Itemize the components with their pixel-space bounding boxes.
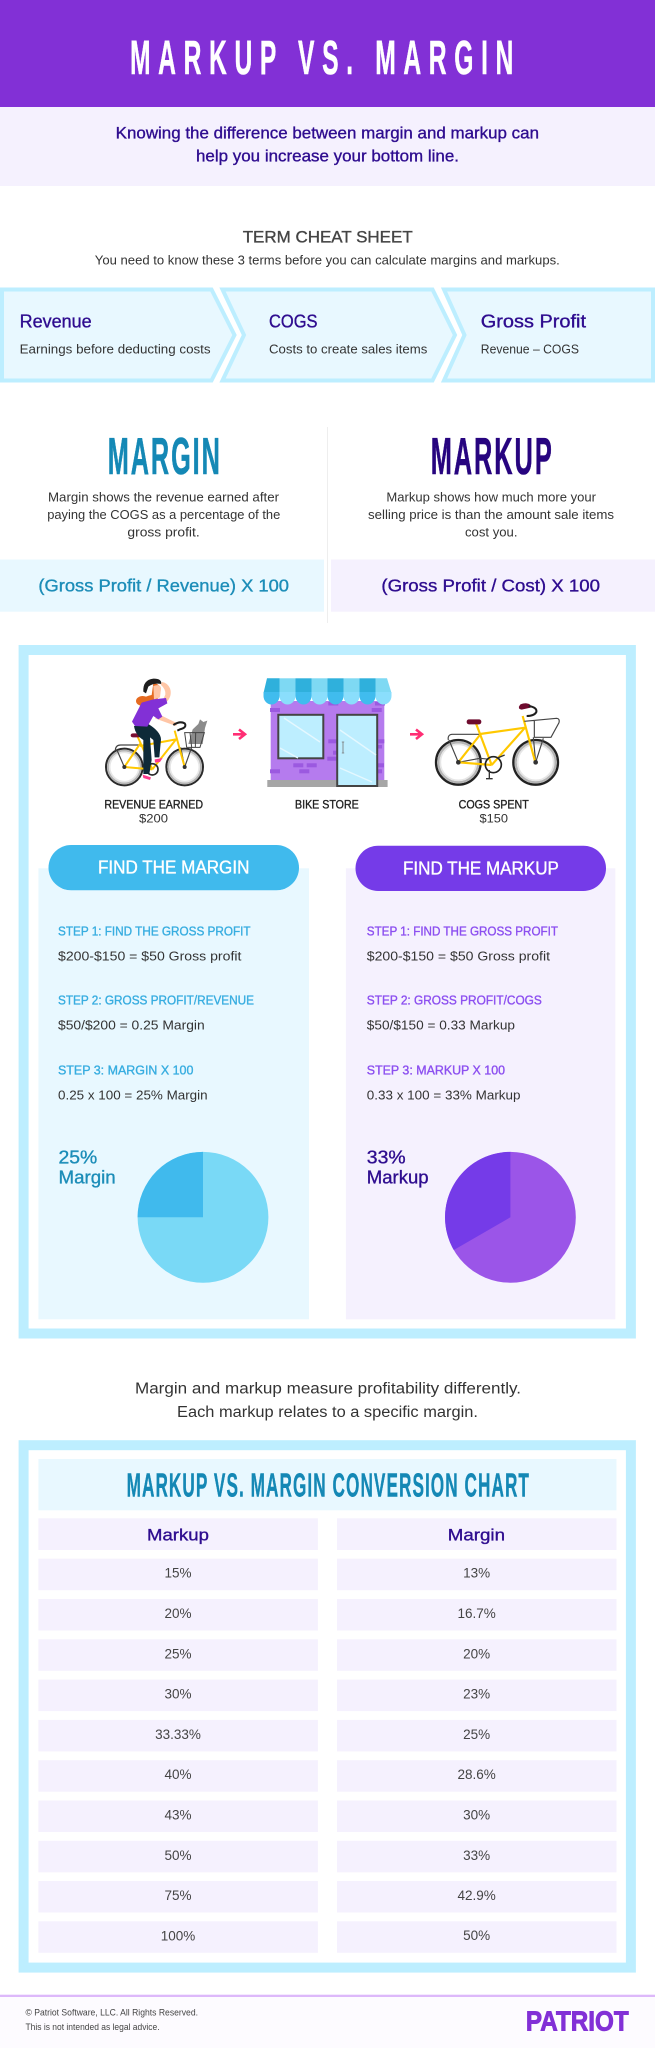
label: COGS spent: COGS SPENT — [459, 797, 529, 811]
header banner — [0, 0, 655, 107]
markup column values: 43% — [164, 1808, 192, 1822]
margin result label: 25% — [58, 1146, 97, 1167]
copyright text: This is not intended as legal advice. — [26, 2022, 160, 2033]
label: revenue earned: $200 — [139, 811, 168, 825]
column header: margin — [337, 1518, 616, 1550]
pill heading: find the markup: FIND THE MARKUP — [403, 858, 559, 878]
markup description: selling price is than the amount sale items — [368, 507, 614, 522]
markup step 3: 0.33 x 100 = 33% Markup — [367, 1087, 520, 1102]
markup column values: 25% — [164, 1646, 192, 1661]
markup description: Markup shows how much more your — [386, 490, 597, 505]
margin column values: 42.9% — [457, 1888, 496, 1903]
icon: yellow bike — [436, 703, 559, 785]
margin description: paying the COGS as a percentage of the — [47, 507, 280, 522]
margin step 2: STEP 2: GROSS PROFIT/REVENUE — [58, 994, 254, 1008]
markup step 3: STEP 3: MARKUP X 100 — [367, 1063, 505, 1077]
markup step 1: STEP 1: FIND THE GROSS PROFIT — [367, 925, 558, 939]
label: COGS spent: $150 — [480, 811, 508, 825]
term cheat sheet heading — [95, 227, 560, 267]
markup column values: 40% — [164, 1767, 192, 1782]
markup step 2: $50/$150 = 0.33 Markup — [367, 1017, 515, 1032]
markup column values: 75% — [164, 1888, 192, 1903]
markup step 3 — [367, 1063, 520, 1102]
markup column values — [38, 1559, 318, 1953]
markup column values: 15% — [164, 1566, 192, 1581]
markup result label: 33% — [367, 1146, 406, 1167]
margin column values: 25% — [463, 1727, 490, 1742]
term cheat sheet heading: TERM CHEAT SHEET — [243, 227, 413, 246]
margin step 3: 0.25 x 100 = 25% Margin — [58, 1087, 208, 1102]
markup step 1 — [367, 925, 558, 963]
subtitle band — [0, 107, 655, 186]
margin column values: 30% — [463, 1808, 490, 1822]
markup result label — [367, 1146, 429, 1187]
panel: conversion chart — [24, 1445, 631, 1968]
markup description: cost you. — [465, 524, 518, 539]
margin description: gross profit. — [127, 524, 200, 539]
panel: worked example frame — [24, 650, 631, 1334]
term arrow: COGS: COGS — [269, 311, 318, 331]
copyright text — [26, 2008, 198, 2033]
margin column values: 16.7% — [457, 1606, 496, 1621]
pill heading: find the margin: FIND THE MARGIN — [98, 857, 249, 877]
markup column values: 100% — [161, 1928, 195, 1944]
margin step 3 — [58, 1063, 208, 1102]
term arrow: COGS: Costs to create sales items — [269, 341, 428, 356]
subtitle band: help you increase your bottom line. — [196, 148, 459, 166]
term arrow: COGS — [222, 290, 455, 380]
chart title — [38, 1459, 616, 1510]
arrow: store to bike — [410, 730, 422, 739]
label: COGS spent — [459, 797, 529, 825]
term cheat sheet heading: You need to know these 3 terms before you can calculate margins and markups. — [95, 252, 560, 267]
pill heading: find the margin — [48, 845, 299, 890]
intro text for conversion chart: Margin and markup measure profitability differently. — [135, 1380, 521, 1397]
margin description — [47, 490, 280, 539]
margin step 1: STEP 1: FIND THE GROSS PROFIT — [58, 925, 251, 939]
column header: markup: Markup — [147, 1525, 209, 1544]
icon: cyclist with bike and cat — [106, 679, 207, 785]
column header: margin: Margin — [448, 1525, 505, 1544]
margin description: Margin shows the revenue earned after — [48, 490, 280, 505]
markup result label: Markup — [367, 1166, 429, 1187]
label: bike store: BIKE STORE — [295, 797, 359, 811]
margin step 1 — [58, 925, 251, 963]
pill heading: find the markup — [356, 846, 606, 891]
term arrow: revenue: Earnings before deducting costs — [20, 341, 211, 356]
margin formula: (Gross Profit / Revenue) X 100 — [38, 576, 289, 596]
markup step 1: $200-$150 = $50 Gross profit — [367, 948, 550, 963]
pie chart: 33% markup — [445, 1152, 576, 1283]
margin step 3: STEP 3: MARGIN X 100 — [58, 1063, 193, 1077]
panel: margin definition — [0, 428, 324, 612]
awning — [264, 678, 392, 704]
markup formula — [331, 560, 655, 612]
intro text for conversion chart — [135, 1380, 521, 1421]
panel: find the markup — [346, 846, 615, 1319]
markup column values: 20% — [164, 1606, 192, 1621]
margin step 2 — [58, 994, 254, 1032]
column header: markup — [38, 1518, 318, 1550]
margin result label: Margin — [58, 1166, 116, 1187]
term arrow: gross profit — [444, 290, 653, 380]
margin column values: 13% — [463, 1566, 490, 1581]
markup description — [368, 490, 614, 539]
margin result label — [58, 1146, 116, 1187]
term arrow: revenue: Revenue — [20, 311, 92, 331]
markup step 2 — [367, 994, 542, 1032]
markup step 2: STEP 2: GROSS PROFIT/COGS — [367, 994, 542, 1008]
margin step 1: $200-$150 = $50 Gross profit — [58, 948, 242, 963]
label: revenue earned — [104, 797, 203, 825]
logo: Patriot: PATRIOT — [526, 2006, 629, 2037]
markup column values: 30% — [164, 1687, 192, 1702]
markup formula: (Gross Profit / Cost) X 100 — [381, 576, 600, 596]
margin column values: 33% — [463, 1848, 490, 1863]
pie chart: 25% margin — [138, 1152, 268, 1283]
margin column values: 28.6% — [457, 1767, 496, 1782]
copyright text: © Patriot Software, LLC. All Rights Reserved. — [26, 2008, 198, 2019]
term arrow: gross profit: Revenue – COGS — [481, 341, 579, 356]
margin column values — [337, 1559, 616, 1953]
margin formula — [0, 560, 324, 612]
subtitle band: Knowing the difference between margin and markup can — [116, 124, 539, 142]
margin column values: 20% — [463, 1646, 490, 1661]
markup column values: 50% — [164, 1848, 192, 1863]
arrow: cyclist to store — [233, 730, 245, 739]
term arrow: revenue — [2, 290, 234, 380]
label: revenue earned: REVENUE EARNED — [104, 797, 203, 811]
footer — [0, 1995, 655, 2048]
panel: margin definition: MARGIN — [108, 428, 222, 486]
margin column values: 23% — [463, 1687, 490, 1702]
margin step 2: $50/$200 = 0.25 Margin — [58, 1017, 205, 1032]
icon: bike store — [264, 678, 392, 787]
margin column values: 50% — [463, 1928, 490, 1943]
intro text for conversion chart: Each markup relates to a specific margin. — [177, 1404, 478, 1421]
markup column values: 33.33% — [155, 1727, 201, 1742]
term arrow: gross profit: Gross Profit — [481, 311, 586, 331]
panel: find the margin — [38, 845, 309, 1319]
panel: markup definition — [331, 428, 655, 612]
